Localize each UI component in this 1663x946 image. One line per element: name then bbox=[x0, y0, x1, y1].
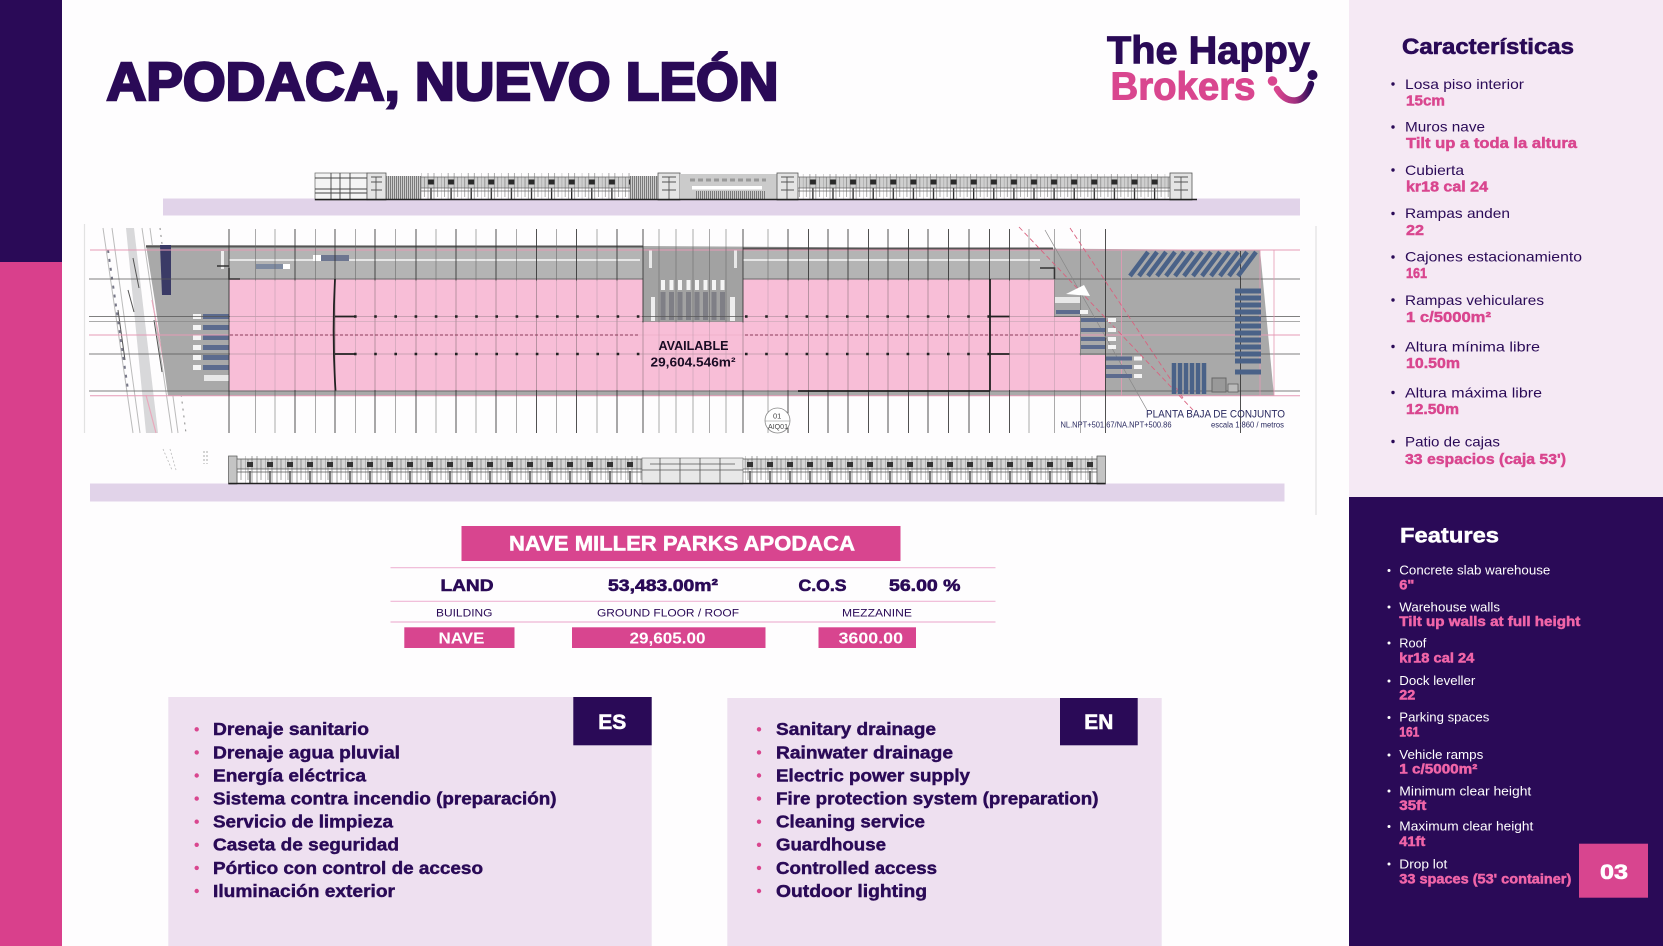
list EN: Cleaning service bbox=[776, 812, 925, 832]
logo: The Happy Brokers: Brokers bbox=[1110, 66, 1256, 108]
item: altura minima: Altura mínima libre bbox=[1405, 339, 1540, 355]
east dock bays bbox=[1055, 285, 1238, 392]
list EN: Electric power supply bbox=[776, 765, 970, 785]
item: losa bbox=[1405, 76, 1524, 109]
item: rampas vehiculares bbox=[1405, 292, 1544, 326]
list ES: Servicio de limpieza bbox=[213, 812, 393, 832]
item: warehouse walls bbox=[1399, 599, 1581, 629]
site plan bbox=[84, 224, 1316, 515]
value: mezzanine bbox=[818, 627, 916, 648]
item: concrete slab bbox=[1399, 563, 1550, 592]
heading: Features bbox=[1400, 524, 1499, 548]
solar panels, south bbox=[1174, 363, 1204, 394]
item: parking spaces: Parking spaces bbox=[1399, 710, 1490, 725]
row: column headers bbox=[436, 607, 912, 619]
item: patio: Patio de cajas bbox=[1405, 434, 1500, 450]
badge ES: ES bbox=[598, 711, 626, 734]
item: patio bbox=[1405, 434, 1566, 468]
item: rampas anden bbox=[1405, 205, 1510, 239]
section marker 01 A1Q01: AIQ01 bbox=[768, 422, 788, 431]
item: dock leveller: 22 bbox=[1399, 688, 1415, 703]
list ES: Caseta de seguridad bbox=[213, 835, 399, 855]
list EN: Controlled access bbox=[776, 858, 937, 878]
item: maximum height bbox=[1399, 819, 1534, 849]
columns and interior walls bbox=[217, 266, 1080, 391]
value: ground floor: 29,605.00 bbox=[630, 630, 706, 647]
item: rampas anden: Rampas anden bbox=[1405, 205, 1510, 221]
drawing caption: PLANTA BAJA DE CONJUNTO bbox=[1146, 409, 1285, 421]
panel: Características bbox=[1349, 0, 1663, 497]
item: concrete slab: 6" bbox=[1399, 577, 1414, 592]
item: concrete slab: Concrete slab warehouse bbox=[1399, 563, 1550, 578]
available area label: 29,604.546m² bbox=[650, 356, 736, 370]
top elevation drawing with lilac strip bbox=[163, 173, 1300, 216]
project title bar bbox=[462, 526, 900, 561]
list ES: Pórtico con control de acceso bbox=[213, 858, 483, 878]
road at left of the site bbox=[103, 228, 186, 433]
row: column headers: BUILDING bbox=[436, 607, 492, 619]
item: cajones bbox=[1405, 249, 1582, 282]
heading: Características bbox=[1402, 34, 1574, 59]
item: rampas vehiculares: 1 c/5000m² bbox=[1406, 310, 1491, 326]
item: warehouse walls: Tilt up walls at full height bbox=[1399, 614, 1581, 629]
list ES: Iluminación exterior bbox=[213, 881, 395, 901]
central yard bbox=[643, 248, 743, 322]
item: warehouse walls: Warehouse walls bbox=[1399, 599, 1500, 614]
drawing caption bbox=[1060, 409, 1285, 430]
item: parking spaces: 161 bbox=[1399, 724, 1420, 739]
page number: 03 bbox=[1600, 861, 1628, 884]
value: mezzanine: 3600.00 bbox=[838, 630, 903, 647]
drawing caption: escala 1:860 / metros bbox=[1211, 420, 1284, 430]
item: cajones: 161 bbox=[1406, 266, 1427, 282]
item: muros bbox=[1405, 119, 1578, 152]
bottom elevation drawing with lilac strip bbox=[90, 449, 1284, 502]
logo: The Happy Brokers bbox=[1107, 30, 1318, 108]
item: minimum height bbox=[1399, 783, 1532, 813]
data table bbox=[390, 568, 996, 648]
item: cubierta: kr18 cal 24 bbox=[1406, 180, 1488, 196]
item: vehicle ramps: 1 c/5000m² bbox=[1399, 761, 1478, 776]
item: drop lot: 33 spaces (53' container) bbox=[1399, 872, 1571, 887]
panel: services ES bbox=[168, 697, 652, 946]
row: land: C.O.S bbox=[798, 576, 846, 595]
item: rampas vehiculares: Rampas vehiculares bbox=[1405, 292, 1544, 308]
available area label: AVAILABLE bbox=[658, 339, 728, 353]
item: roof bbox=[1399, 635, 1475, 665]
available area label bbox=[650, 339, 736, 370]
item: altura minima: 10.50m bbox=[1406, 356, 1460, 372]
item: parking spaces bbox=[1399, 710, 1490, 739]
badge ES bbox=[573, 697, 652, 745]
item: altura maxima: 12.50m bbox=[1406, 402, 1459, 418]
item: muros: Muros nave bbox=[1405, 119, 1485, 135]
item: minimum height: Minimum clear height bbox=[1399, 783, 1532, 798]
item: vehicle ramps bbox=[1399, 747, 1484, 776]
list EN: Guardhouse bbox=[776, 835, 886, 855]
list EN: Outdoor lighting bbox=[776, 881, 927, 901]
value: ground floor bbox=[572, 627, 766, 648]
left dock bays bbox=[193, 251, 229, 381]
item: cubierta: Cubierta bbox=[1405, 162, 1464, 178]
badge EN: EN bbox=[1084, 711, 1113, 734]
item: maximum height: 41ft bbox=[1399, 834, 1426, 849]
item: rampas anden: 22 bbox=[1406, 223, 1424, 239]
list EN: Fire protection system (preparation) bbox=[776, 788, 1098, 808]
row: column headers: GROUND FLOOR / ROOF bbox=[597, 607, 739, 619]
list EN: Sanitary drainage bbox=[776, 719, 936, 739]
badge EN bbox=[1060, 698, 1138, 745]
item: dock leveller bbox=[1399, 673, 1476, 703]
left colour band bbox=[0, 0, 62, 946]
pink veil softening grid lines over the warehouse bbox=[230, 280, 1104, 390]
pink available area bbox=[230, 280, 1105, 390]
logo: The Happy Brokers: The Happy bbox=[1107, 30, 1311, 72]
item: vehicle ramps: Vehicle ramps bbox=[1399, 747, 1484, 762]
item: losa: Losa piso interior bbox=[1405, 76, 1524, 92]
grey site footprint bbox=[146, 245, 1274, 396]
item: maximum height: Maximum clear height bbox=[1399, 819, 1534, 834]
list ES: Energía eléctrica bbox=[213, 765, 366, 785]
panel: services EN bbox=[727, 698, 1162, 946]
section marker 01 A1Q01: 01 bbox=[773, 412, 781, 420]
row: land: 53,483.00m² bbox=[608, 576, 718, 595]
page number bbox=[1579, 844, 1648, 898]
item: minimum height: 35ft bbox=[1399, 798, 1427, 813]
project title bar: NAVE MILLER PARKS APODACA bbox=[509, 533, 855, 556]
solar panels, north east bbox=[1130, 252, 1256, 276]
list EN: Rainwater drainage bbox=[776, 742, 953, 762]
row: land: LAND bbox=[440, 576, 494, 595]
bullets bbox=[1388, 570, 1391, 864]
list EN bbox=[759, 719, 1098, 901]
item: altura maxima bbox=[1405, 384, 1542, 418]
grid lines bbox=[89, 227, 1300, 433]
bullets bbox=[1391, 84, 1395, 442]
value: nave: NAVE bbox=[438, 630, 484, 647]
value: nave bbox=[404, 627, 514, 648]
item: altura maxima: Altura máxima libre bbox=[1405, 384, 1542, 400]
item: drop lot: Drop lot bbox=[1399, 856, 1448, 871]
item: cubierta bbox=[1405, 162, 1488, 196]
list ES bbox=[197, 719, 556, 901]
item: drop lot bbox=[1399, 856, 1571, 887]
item: patio: 33 espacios (caja 53') bbox=[1405, 452, 1566, 468]
item: dock leveller: Dock leveller bbox=[1399, 673, 1476, 688]
solar panels, east bbox=[1235, 291, 1261, 372]
title: APODACA, NUEVO LEÓN bbox=[106, 52, 778, 112]
panel: Features bbox=[1349, 497, 1663, 946]
item: roof: kr18 cal 24 bbox=[1399, 650, 1475, 665]
drawing caption: NL.NPT+501.67/NA.NPT+500.86 bbox=[1060, 420, 1172, 430]
list ES: Sistema contra incendio (preparación) bbox=[213, 788, 556, 808]
list ES: Drenaje sanitario bbox=[213, 719, 369, 739]
item: cajones: Cajones estacionamiento bbox=[1405, 249, 1582, 265]
row: land: 56.00 % bbox=[889, 576, 960, 595]
row: column headers: MEZZANINE bbox=[842, 607, 912, 619]
row: land bbox=[440, 576, 960, 595]
item: roof: Roof bbox=[1399, 635, 1427, 650]
item: muros: Tilt up a toda la altura bbox=[1406, 136, 1578, 152]
list ES: Drenaje agua pluvial bbox=[213, 742, 400, 762]
item: losa: 15cm bbox=[1406, 93, 1445, 109]
section marker 01 A1Q01 bbox=[765, 408, 790, 433]
item: altura minima bbox=[1405, 339, 1540, 372]
